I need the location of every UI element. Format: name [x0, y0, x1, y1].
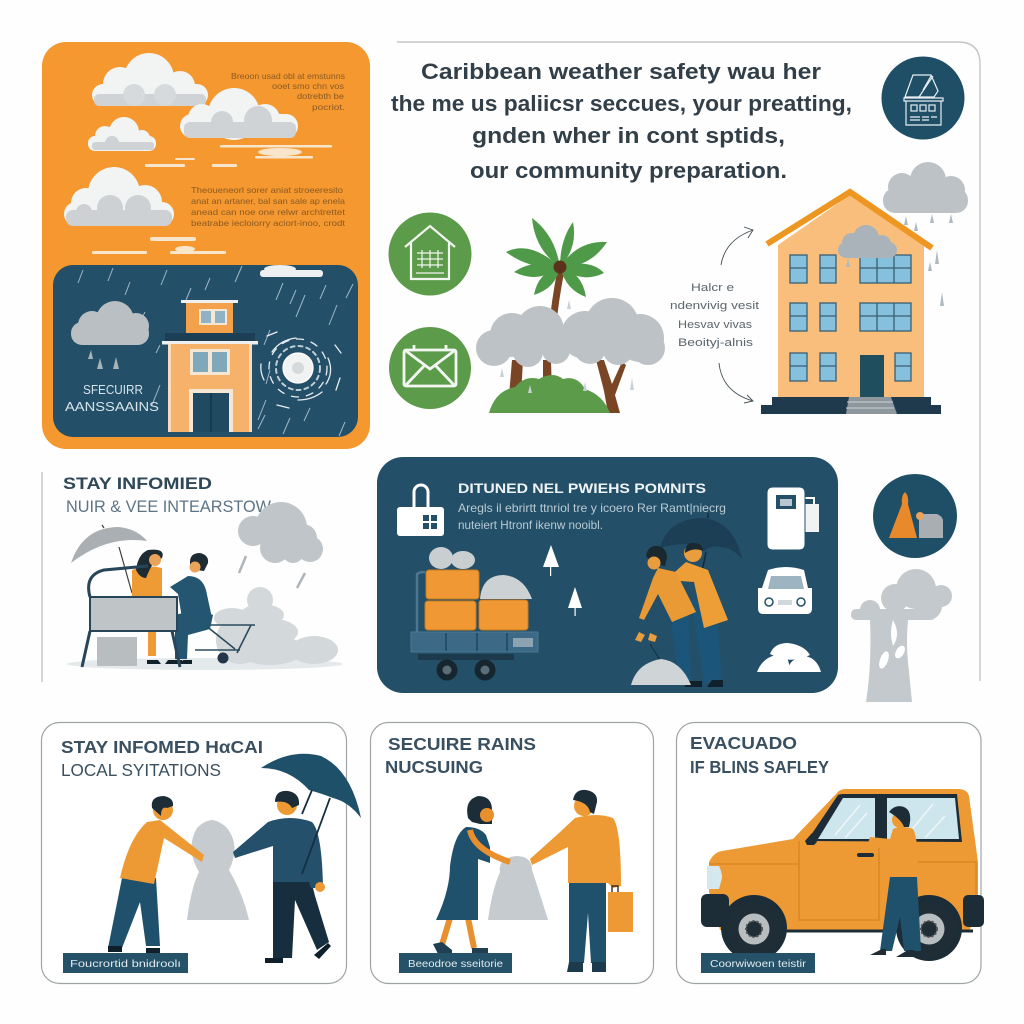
- title: our community preparation.: [470, 158, 787, 183]
- cloud 4: [64, 167, 174, 226]
- palm leaves: [506, 218, 607, 297]
- umbrella: [71, 525, 147, 593]
- card title: [61, 737, 263, 780]
- coconut: [554, 260, 566, 274]
- steps: [761, 397, 941, 414]
- person at car: [868, 806, 921, 957]
- label: [63, 953, 188, 973]
- icon: backpack: [767, 487, 819, 550]
- bumpers: [701, 894, 729, 927]
- heading: stay informed: [63, 474, 271, 516]
- card text: [458, 501, 726, 532]
- storm cloud above building: [846, 162, 968, 306]
- orange car: [701, 789, 984, 961]
- text block: lower note: anat an artaner, bal san sale ap enela: [191, 196, 345, 206]
- text block: upper note: pocriot.: [312, 102, 345, 112]
- title: the me us paliicsr seccues, your preatting,: [391, 91, 852, 116]
- palm tree and cloud scene: [476, 218, 665, 413]
- text block: house note: Hesvav vivas: [678, 319, 753, 331]
- umbrella and two people: [631, 513, 742, 687]
- card title: NUCSUING: [385, 757, 483, 777]
- door handle: [857, 853, 874, 857]
- card title: [385, 734, 536, 777]
- icon: green house badge: [388, 212, 472, 296]
- text block: lower note: [191, 185, 346, 228]
- card title: [690, 733, 829, 777]
- icon: orange cone and bag badge: [873, 474, 957, 558]
- bench: [82, 566, 180, 667]
- rain drops: [500, 300, 634, 393]
- label: [701, 953, 815, 973]
- text block: house note: Beoityj-alnis: [678, 337, 754, 349]
- label: [399, 953, 512, 973]
- text block: upper note: ooet smo chn vos: [272, 81, 344, 91]
- frame lines: [397, 42, 980, 681]
- cloud 3: [88, 117, 156, 151]
- man: [165, 553, 213, 664]
- cloud 2: [180, 88, 298, 140]
- apartment building: [761, 192, 941, 414]
- ground shadow: [67, 658, 343, 670]
- cart table: [195, 625, 255, 653]
- arrow marker 2: [568, 587, 582, 616]
- text block: lower note: anead can noe one relwr archtrettet: [191, 207, 346, 217]
- label: Foucrortid bnidroolı: [70, 958, 181, 970]
- cloud 1: [92, 53, 208, 106]
- sandbag: [488, 856, 548, 920]
- windows: [790, 255, 911, 381]
- label: Beeodroe sseitorie: [408, 958, 503, 970]
- left divider: [41, 472, 43, 682]
- door outline: [709, 841, 976, 920]
- rain: [239, 556, 305, 588]
- text block: house note: Halcr e: [691, 282, 734, 294]
- tree trunks: [509, 360, 626, 413]
- title: gnden wher in cont sptids,: [472, 123, 785, 148]
- arrow marker 1: [543, 545, 559, 576]
- card title: EVACUADO: [690, 733, 797, 753]
- label: secure: [65, 382, 159, 414]
- card text: nuteiert Htronf ikenw nooibl.: [458, 518, 603, 532]
- subheading: NUIR & VEE INTEARSTOW: [66, 497, 271, 516]
- text block: upper note: Breoon usad obl at emstunns: [231, 71, 345, 81]
- card title: LOCAL SYITATIONS: [61, 760, 221, 780]
- card title: IF BLINS SAFLEY: [690, 757, 829, 777]
- small cloud: [260, 265, 323, 277]
- scene: people at bench: [67, 502, 343, 670]
- card title: SECUIRE RAINS: [388, 734, 536, 754]
- card heading: DITUNED NEL PWIEHS POMNITS: [458, 480, 706, 496]
- person with orange shirt: [108, 796, 204, 953]
- icon: green mail badge: [389, 327, 471, 409]
- house: [162, 300, 258, 432]
- label: secure: SFECUIRR: [83, 382, 143, 397]
- heading: stay informed: STAY INFOMIED: [63, 474, 212, 493]
- orange bag: [608, 886, 633, 932]
- car windows: [807, 794, 962, 842]
- curved arrow: up: [721, 227, 753, 265]
- card: secure rains: [370, 722, 654, 984]
- card: evacuate: [676, 722, 984, 984]
- card title: STAY INFOMED HαCAI: [61, 737, 263, 757]
- text block: upper note: [231, 71, 345, 112]
- case: [97, 637, 137, 666]
- bush: [489, 375, 610, 413]
- headlight: [707, 866, 722, 889]
- label: Coorwiwoen teistir: [710, 958, 807, 970]
- icon: sandbags: [757, 643, 821, 672]
- man: [530, 790, 621, 972]
- title: Caribbean weather safety wau her: [421, 59, 821, 84]
- roof: [767, 192, 932, 248]
- label: secure: AANSSAAINS: [65, 399, 159, 414]
- door: [860, 355, 884, 398]
- panel: dark preparation card: [377, 457, 838, 693]
- card: stay informed: [42, 722, 361, 984]
- gray clouds: [476, 298, 665, 367]
- icon: gray cloud on trunk: [851, 569, 952, 702]
- umbrella: [261, 754, 361, 874]
- icon: car: [758, 567, 812, 614]
- card text: Aregls il ebrirtt ttnriol tre y icoero Rer Ramt|niecrg: [458, 501, 726, 515]
- dark storm scene panel: [53, 265, 358, 437]
- person with umbrella: [233, 791, 331, 963]
- sandbag: [187, 820, 249, 920]
- woman: [132, 550, 163, 664]
- hurricane spiral: [261, 332, 341, 408]
- cart with boxes: [411, 547, 538, 680]
- text block: lower note: Theoueneorl sorer aniat stroeeresito: [191, 185, 343, 195]
- cloud: [238, 502, 323, 563]
- rain streaks: [78, 266, 353, 436]
- text block: upper note: dotrebth be: [297, 91, 344, 101]
- icon: bag with lock: [397, 485, 444, 536]
- wisps of cloud: [92, 145, 332, 254]
- icon: house badge: [882, 56, 964, 140]
- sandbag pile: [214, 587, 338, 665]
- palm trunk: [552, 270, 561, 332]
- legs: [670, 600, 722, 682]
- text block: house note: [670, 282, 759, 349]
- title: [391, 59, 852, 183]
- cloud on building: [838, 225, 897, 258]
- text block: house note: ndenvivig vesit: [670, 300, 759, 312]
- wheels: [721, 895, 962, 961]
- storm cloud with drops: [71, 301, 149, 369]
- woman: [433, 796, 510, 954]
- panel: orange weather panel: [42, 42, 370, 449]
- curved arrow: down: [719, 363, 753, 403]
- text block: lower note: beatrabe iecloiorry aciort-inoo, crodt: [191, 218, 346, 228]
